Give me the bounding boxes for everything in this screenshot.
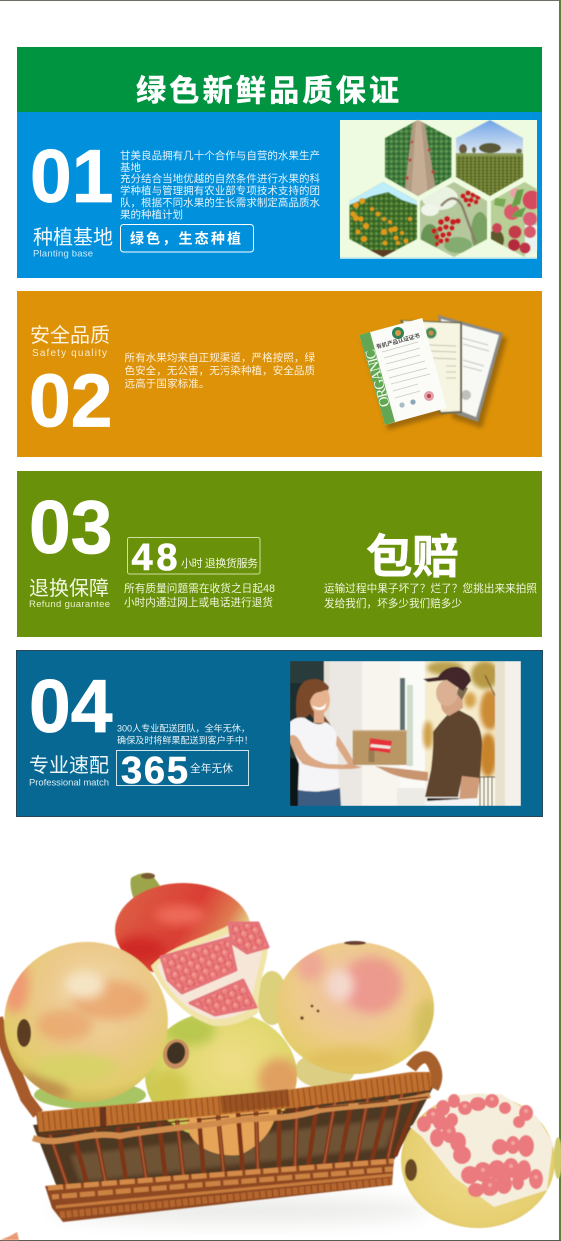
- compensation description: 发给我们，坏多少我们赔多少: [324, 597, 462, 610]
- heading: professional delivery: 专业速配: [29, 754, 109, 777]
- certificate: back grey: [438, 315, 503, 422]
- hexagon: green field: [456, 120, 523, 196]
- badge: green ecological planting: 绿色，生态种植: [130, 230, 241, 246]
- planting description: 果的种植计划: [120, 208, 183, 221]
- certificate title: 有机产品认证证书: [375, 331, 421, 351]
- refund description: [124, 582, 275, 609]
- rim: [36, 1072, 431, 1132]
- pomegranate: green lower: [295, 1052, 355, 1088]
- badge: 365 days: [116, 750, 248, 792]
- left handle: [0, 1018, 38, 1114]
- customer: [290, 679, 360, 806]
- compensation description: 运输过程中果子坏了？烂了？您挑出来来拍照: [324, 582, 537, 595]
- hexagon: red apples: [488, 182, 542, 257]
- stray fruit corner: [0, 1232, 19, 1240]
- badge: 48 hour returns: 48: [132, 537, 178, 579]
- photo: pomegranates in a wicker basket: [0, 873, 561, 1240]
- pomegranate: small back: [257, 971, 287, 1025]
- pomegranate: back red: [114, 873, 251, 977]
- certificate band label: ORGANIC: [363, 347, 394, 409]
- hexagon: orange tree: [349, 182, 417, 257]
- number 01: 01: [30, 134, 113, 218]
- panel: 04 professional delivery: [16, 650, 542, 816]
- safety description: 远高于国家标准。: [124, 377, 210, 390]
- number 02: 02: [29, 358, 112, 442]
- planting description: 甘美良品拥有几十个合作与自营的水果生产: [120, 149, 320, 162]
- panel: 02 safety quality: [17, 291, 542, 457]
- number 03: 03: [29, 485, 112, 569]
- hexagon: red cherries: [420, 182, 489, 257]
- small fruit at right edge: [554, 1137, 561, 1179]
- icon: organic certificates: [359, 315, 507, 430]
- fruit seen through basket: [186, 1110, 277, 1155]
- pomegranate: opened right: [401, 1094, 555, 1228]
- bars: [50, 1092, 420, 1193]
- number 04: 04: [29, 664, 113, 748]
- delivery description: 确保及时将鲜果配送到客户手中！: [117, 734, 253, 746]
- delivery description: [117, 722, 253, 746]
- panel: 01 planting base: [17, 112, 542, 278]
- english caption: professional match: Professional match: [29, 778, 109, 788]
- refund description: 所有质量问题需在收货之日起48: [124, 582, 275, 595]
- planting description: 队，根据不同水果的生长需求制定高品质水: [120, 196, 320, 209]
- certificate: front organic: [359, 318, 447, 425]
- heading: planting base: 种植基地: [33, 226, 113, 249]
- title: 绿色新鲜品质保证: [136, 75, 399, 108]
- photo collage: hexagon farm images: [340, 120, 542, 259]
- badge: 365 days: 365: [121, 750, 188, 792]
- badge: 48 hour returns: [128, 537, 260, 579]
- planting description: [120, 149, 320, 221]
- panel: 03 refund guarantee: [17, 471, 542, 637]
- pomegranate: large right: [276, 941, 442, 1074]
- basket interior: [33, 1082, 436, 1195]
- planting description: 学种植与管理拥有农业部专项技术支持的团: [120, 184, 320, 197]
- planting description: 充分结合当地优越的自然条件进行水果的科: [120, 172, 320, 185]
- heading: safety quality: 安全品质: [30, 324, 110, 347]
- badge: 365 days: 全年无休: [190, 762, 233, 775]
- english caption: safety quality: Safety quality: [32, 348, 107, 359]
- english caption: refund guarantee: Refund guarantee: [29, 599, 110, 610]
- right handle: [411, 1057, 436, 1088]
- badge: 48 hour returns: 小时 退换货服务: [181, 556, 258, 570]
- pomegranate: large left: [3, 941, 169, 1102]
- pomegranate: opened wedge: [151, 922, 268, 1026]
- hexagon: strawberry rows: [385, 120, 452, 196]
- badge: green ecological planting: [120, 224, 254, 252]
- parcel box: [353, 730, 407, 765]
- photo: courier delivering parcel: [290, 661, 521, 806]
- safety description: 色安全，无公害，无污染种植，安全品质: [124, 364, 315, 377]
- heading: refund guarantee: 退换保障: [29, 577, 109, 600]
- bottom band: [45, 1158, 394, 1222]
- certificate: middle cream: [400, 320, 462, 414]
- refund description: 小时内通过网上或电话进行退货: [124, 596, 273, 609]
- safety description: 所有水果均来自正规渠道，严格按照，绿: [124, 351, 316, 364]
- pomegranate seeds: [417, 1094, 543, 1197]
- courier: [375, 667, 482, 806]
- delivery description: 300人专业配送团队，全年无休，: [117, 722, 250, 734]
- heading: full compensation: 包赔: [366, 531, 459, 583]
- english caption: planting base: Planting base: [33, 248, 93, 260]
- panel: header banner: [17, 47, 542, 112]
- compensation description: [324, 582, 537, 610]
- upper weave: [33, 1095, 430, 1141]
- wicker basket: [33, 1057, 436, 1222]
- planting description: 基地: [120, 161, 142, 174]
- safety description: [124, 351, 316, 390]
- pomegranate: centre yellow: [145, 1011, 302, 1139]
